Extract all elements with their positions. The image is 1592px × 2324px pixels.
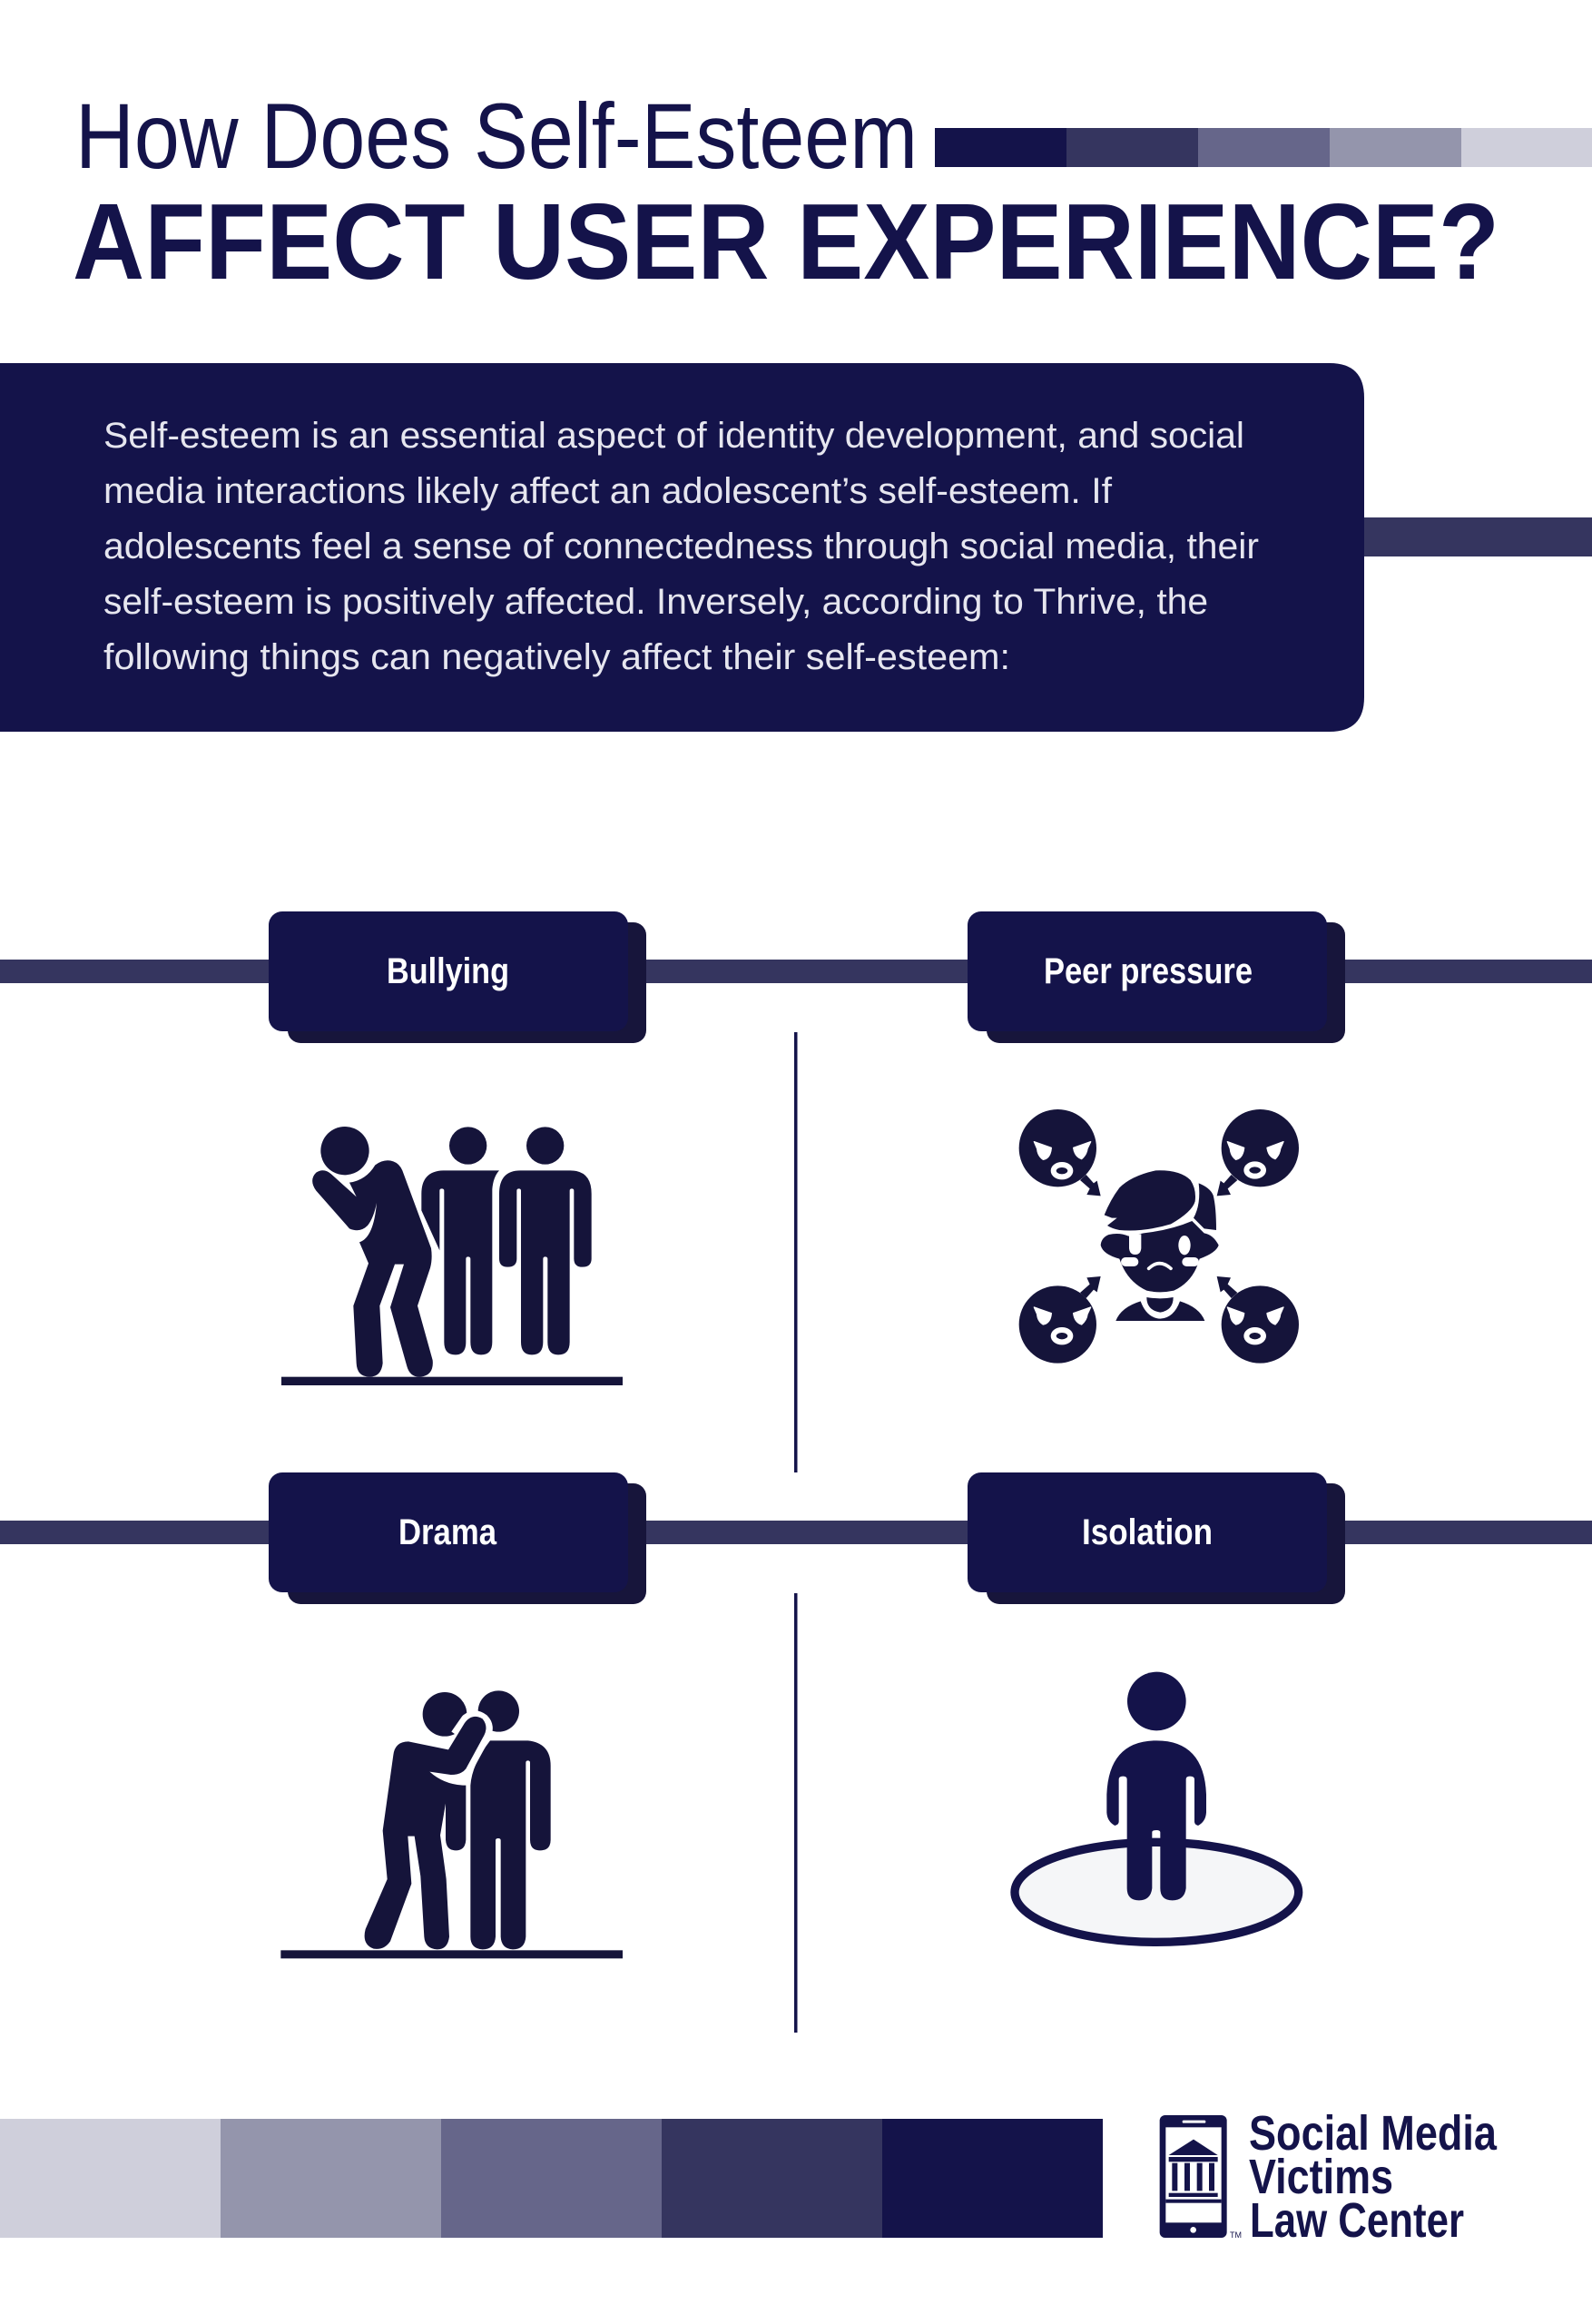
angry faces details: [1034, 1142, 1283, 1324]
logo: Social Media Victims Law Center: Victims: [1249, 2150, 1393, 2204]
intro text: [103, 416, 1259, 677]
icon: phone with courthouse: [1160, 2115, 1227, 2238]
logo: Social Media Victims Law Center: Social Media: [1249, 2106, 1498, 2161]
label: Drama: Drama: [398, 1512, 497, 1552]
title: AFFECT USER EXPERIENCE?: [73, 182, 1499, 302]
intro text: following things can negatively affect their self-esteem:: [103, 637, 1010, 677]
intro text: media interactions likely affect an adolescent’s self-esteem. If: [103, 471, 1113, 511]
logo: Social Media Victims Law Center: Law Center: [1250, 2193, 1464, 2248]
intro text: adolescents feel a sense of connectedness through social media, their: [103, 527, 1259, 566]
logo: Social Media Victims Law Center: TM: [1230, 2230, 1242, 2240]
gradient strip: footer: [0, 2119, 1103, 2238]
icon: peer pressure faces: [1019, 1109, 1299, 1364]
label: Isolation: [968, 1472, 1345, 1604]
divider: row 2: [794, 1593, 797, 2033]
label: Bullying: Bullying: [387, 951, 509, 991]
label: Bullying: [269, 911, 646, 1043]
panel: introduction: [0, 363, 1364, 732]
icon: bullying figures: [281, 1127, 623, 1385]
label: Peer pressure: [968, 911, 1345, 1043]
divider: row 1: [794, 1032, 797, 1472]
icon: drama whispering figures: [280, 1690, 623, 1958]
horizontal band: row 2: [0, 1521, 1592, 1544]
horizontal band: row 1: [0, 960, 1592, 983]
intro text: self-esteem is positively affected. Inversely, according to Thrive, the: [103, 582, 1208, 622]
gradient strip: title: [935, 128, 1592, 167]
intro text: Self-esteem is an essential aspect of identity development, and social: [103, 416, 1244, 456]
logo: Social Media Victims Law Center: [1160, 2106, 1498, 2248]
label: Peer pressure: Peer pressure: [1044, 951, 1253, 991]
title: How Does Self-Esteem: [75, 84, 918, 188]
icon: isolated person in circle: [1015, 1672, 1299, 1942]
label: Isolation: Isolation: [1082, 1512, 1213, 1552]
title: [73, 84, 1499, 302]
connector bar: intro panel: [1352, 517, 1592, 556]
icon: central sad person: [1101, 1170, 1219, 1321]
label: Drama: [269, 1472, 646, 1604]
